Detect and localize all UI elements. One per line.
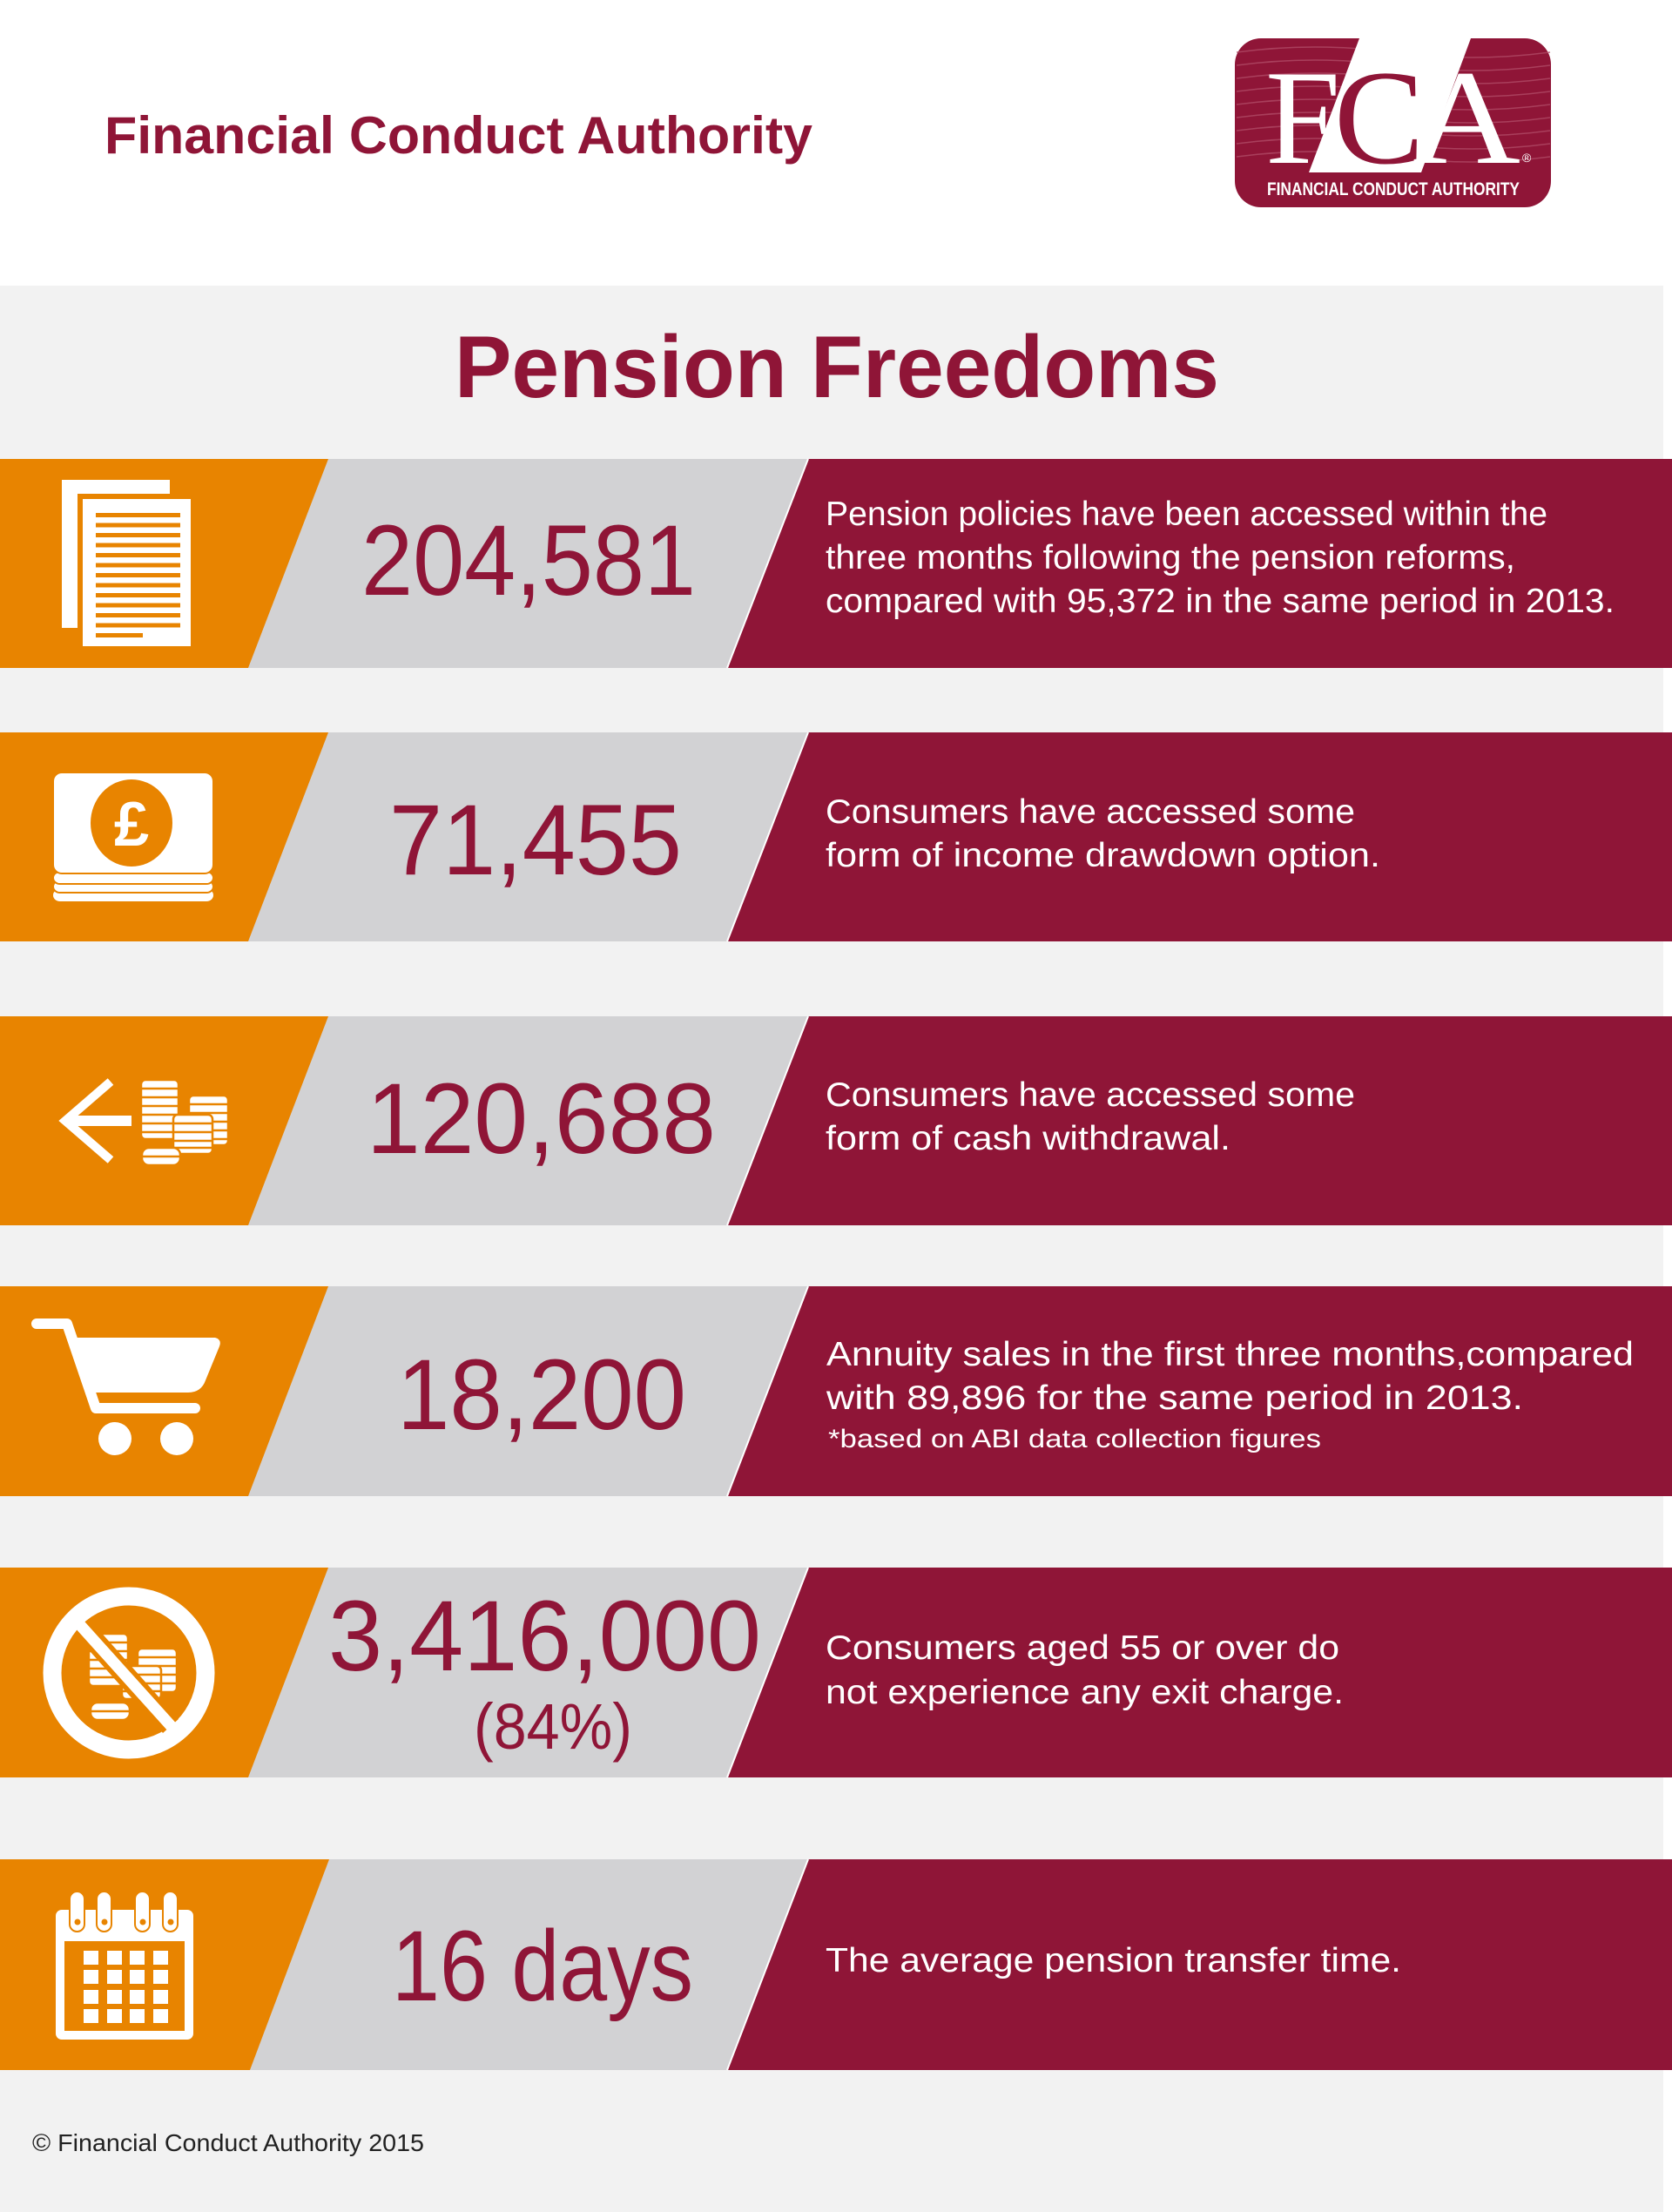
text: description 2	[826, 793, 1380, 874]
icon: banknotes with pound: £	[114, 790, 149, 860]
panel: row 5 exit charges	[0, 1568, 1672, 1777]
footer: copyright: © Financial Conduct Authority 2015	[32, 2129, 424, 2156]
text: description 4: Annuity sales in the first three months,compared	[826, 1336, 1634, 1373]
icon: arrow and coins	[65, 1080, 228, 1165]
text: description 1	[826, 496, 1615, 620]
logo: FCA: FINANCIAL CONDUCT AUTHORITY	[1267, 179, 1520, 199]
panel: row 2 income drawdown	[0, 732, 1672, 941]
number: 16 days: 16 days	[392, 1911, 693, 2022]
number: 71,455: 71,455	[389, 785, 682, 896]
number: 3,416,000 (84%): 3,416,000	[328, 1581, 761, 1692]
number: 18,200: 18,200	[397, 1339, 686, 1451]
panel: row 1 policies accessed	[0, 459, 1672, 668]
number: 3,416,000 (84%): (84%)	[474, 1690, 632, 1763]
panel: row 4 annuity sales	[0, 1286, 1672, 1496]
text: description 3: Consumers have accessed some	[826, 1076, 1355, 1114]
header: organisation name: Financial Conduct Authority	[104, 106, 813, 165]
icon: no coins sign	[52, 1596, 206, 1750]
icon: shopping cart	[37, 1324, 220, 1455]
text: description 4: *based on ABI data collection figures	[828, 1425, 1321, 1453]
text: description 1: Pension policies have been accessed within the	[826, 496, 1547, 533]
logo: FCA	[1235, 38, 1551, 207]
text: description 1: compared with 95,372 in the same period in 2013.	[826, 583, 1615, 620]
text: description 1: three months following the pension reforms,	[826, 539, 1515, 577]
number: 3,416,000 (84%)	[328, 1581, 761, 1763]
number: 204,581: 204,581	[361, 505, 696, 617]
text: description 4	[826, 1336, 1634, 1453]
icon: banknotes with pound	[53, 772, 213, 901]
number: 120,688: 120,688	[367, 1063, 716, 1175]
text: description 5: not experience any exit charge.	[826, 1674, 1344, 1711]
icon: calendar	[56, 1892, 193, 2040]
logo: FCA: ®	[1522, 151, 1532, 165]
text: description 2: form of income drawdown option.	[826, 837, 1380, 874]
title: Pension Freedoms	[455, 319, 1219, 416]
panel: row 6 transfer time	[0, 1859, 1672, 2070]
text: description 2: Consumers have accessed some	[826, 793, 1355, 831]
icon: documents	[62, 480, 196, 651]
text: description 5	[826, 1629, 1344, 1711]
text: description 6: The average pension transfer time.	[826, 1942, 1401, 1979]
logo: FCA: C	[1334, 43, 1424, 192]
text: description 5: Consumers aged 55 or over do	[826, 1629, 1339, 1667]
logo: FCA: A	[1412, 43, 1520, 192]
panel: row 3 cash withdrawal	[0, 1016, 1672, 1225]
text: description 4: with 89,896 for the same period in 2013.	[826, 1379, 1523, 1417]
text: description 3	[826, 1076, 1355, 1157]
logo: FCA: F	[1265, 43, 1340, 192]
text: description 3: form of cash withdrawal.	[826, 1120, 1230, 1157]
